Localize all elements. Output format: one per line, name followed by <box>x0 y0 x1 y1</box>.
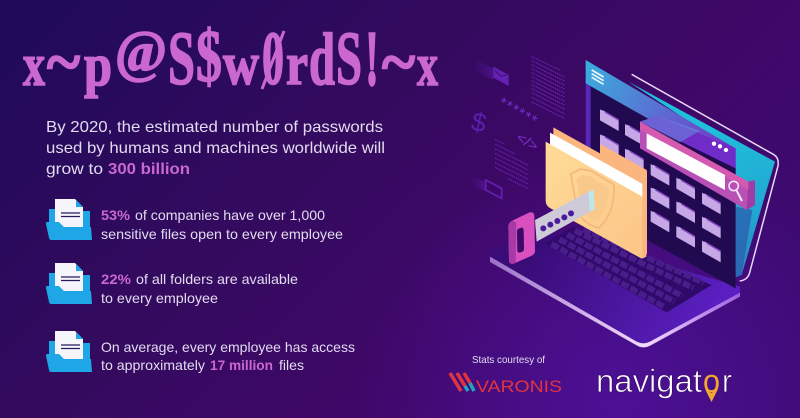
title: p <box>84 32 112 98</box>
intro text block: By 2020, the estimated number of passwords <box>46 119 383 136</box>
intro text block: 300 billion <box>108 161 190 178</box>
password field <box>470 175 502 198</box>
logo: navigator: navigat <box>596 363 702 399</box>
logo: navigator: r <box>722 363 732 399</box>
title: x <box>23 32 45 98</box>
icon: dollar: $ <box>469 106 490 138</box>
stat 2 text: 22% <box>101 271 132 287</box>
stat 1 text <box>101 207 343 242</box>
floating data decorations <box>469 57 565 198</box>
title: r <box>286 31 308 97</box>
logo: Varonis: VARONIS <box>476 377 562 396</box>
code symbol: </> <box>514 130 541 154</box>
stat 3 <box>46 331 355 373</box>
security folder <box>546 127 647 259</box>
stat 1 text: 53% <box>101 207 131 223</box>
icon: magnifier <box>729 181 742 201</box>
title: S <box>336 17 362 101</box>
title: ~ <box>47 26 80 99</box>
stat 2 text <box>101 271 298 306</box>
credit: stats courtesy of: Stats courtesy of <box>472 354 545 366</box>
stat 3 text: to approximately <box>101 357 205 373</box>
password asterisks: ****** <box>495 94 540 130</box>
code lines <box>532 57 565 119</box>
title: S <box>168 17 195 101</box>
icon: location pin: o <box>703 363 720 399</box>
title <box>23 16 438 101</box>
logo: navigator <box>596 363 732 402</box>
intro text block <box>46 119 385 178</box>
laptop illustration <box>469 57 778 347</box>
stat 1 text: sensitive files open to every employee <box>101 226 343 242</box>
icon: folder with document <box>46 199 92 240</box>
text lines <box>495 139 528 189</box>
title: 0 <box>262 17 284 101</box>
icon: shield <box>571 169 614 228</box>
title: w <box>223 31 260 97</box>
search bar <box>640 116 755 210</box>
icon: folder with document <box>46 331 92 372</box>
stat 2 text: of all folders are available <box>136 271 298 287</box>
title: $ <box>196 16 222 98</box>
stat 2 text: to every employee <box>101 290 218 306</box>
stat 3 text: 17 million <box>210 357 273 373</box>
logo: Varonis <box>450 373 562 396</box>
title: ! <box>366 17 378 101</box>
intro text block: grow to <box>46 161 103 178</box>
icon: folder with document <box>46 263 92 304</box>
stat 1 <box>46 199 343 242</box>
title: @ <box>115 19 167 84</box>
logo mark <box>450 373 474 391</box>
stat 3 text <box>101 339 355 373</box>
key <box>508 190 595 264</box>
laptop base <box>490 228 740 347</box>
keyboard <box>545 227 712 312</box>
stat 3 text: On average, every employee has access <box>101 339 355 355</box>
search field <box>647 133 725 190</box>
window dots <box>712 141 728 152</box>
icon: menu <box>592 70 604 84</box>
stat 2 <box>46 263 298 306</box>
icon: envelope <box>473 58 509 86</box>
title: d <box>309 19 335 101</box>
stat 1 text: of companies have over 1,000 <box>135 207 325 223</box>
stat 3 text: files <box>279 357 304 373</box>
title: x <box>417 32 438 98</box>
intro text block: used by humans and machines worldwide will <box>46 140 385 157</box>
laptop lid <box>628 74 778 281</box>
title: ~ <box>382 26 415 99</box>
folder grid <box>600 109 721 262</box>
application window <box>586 60 736 288</box>
